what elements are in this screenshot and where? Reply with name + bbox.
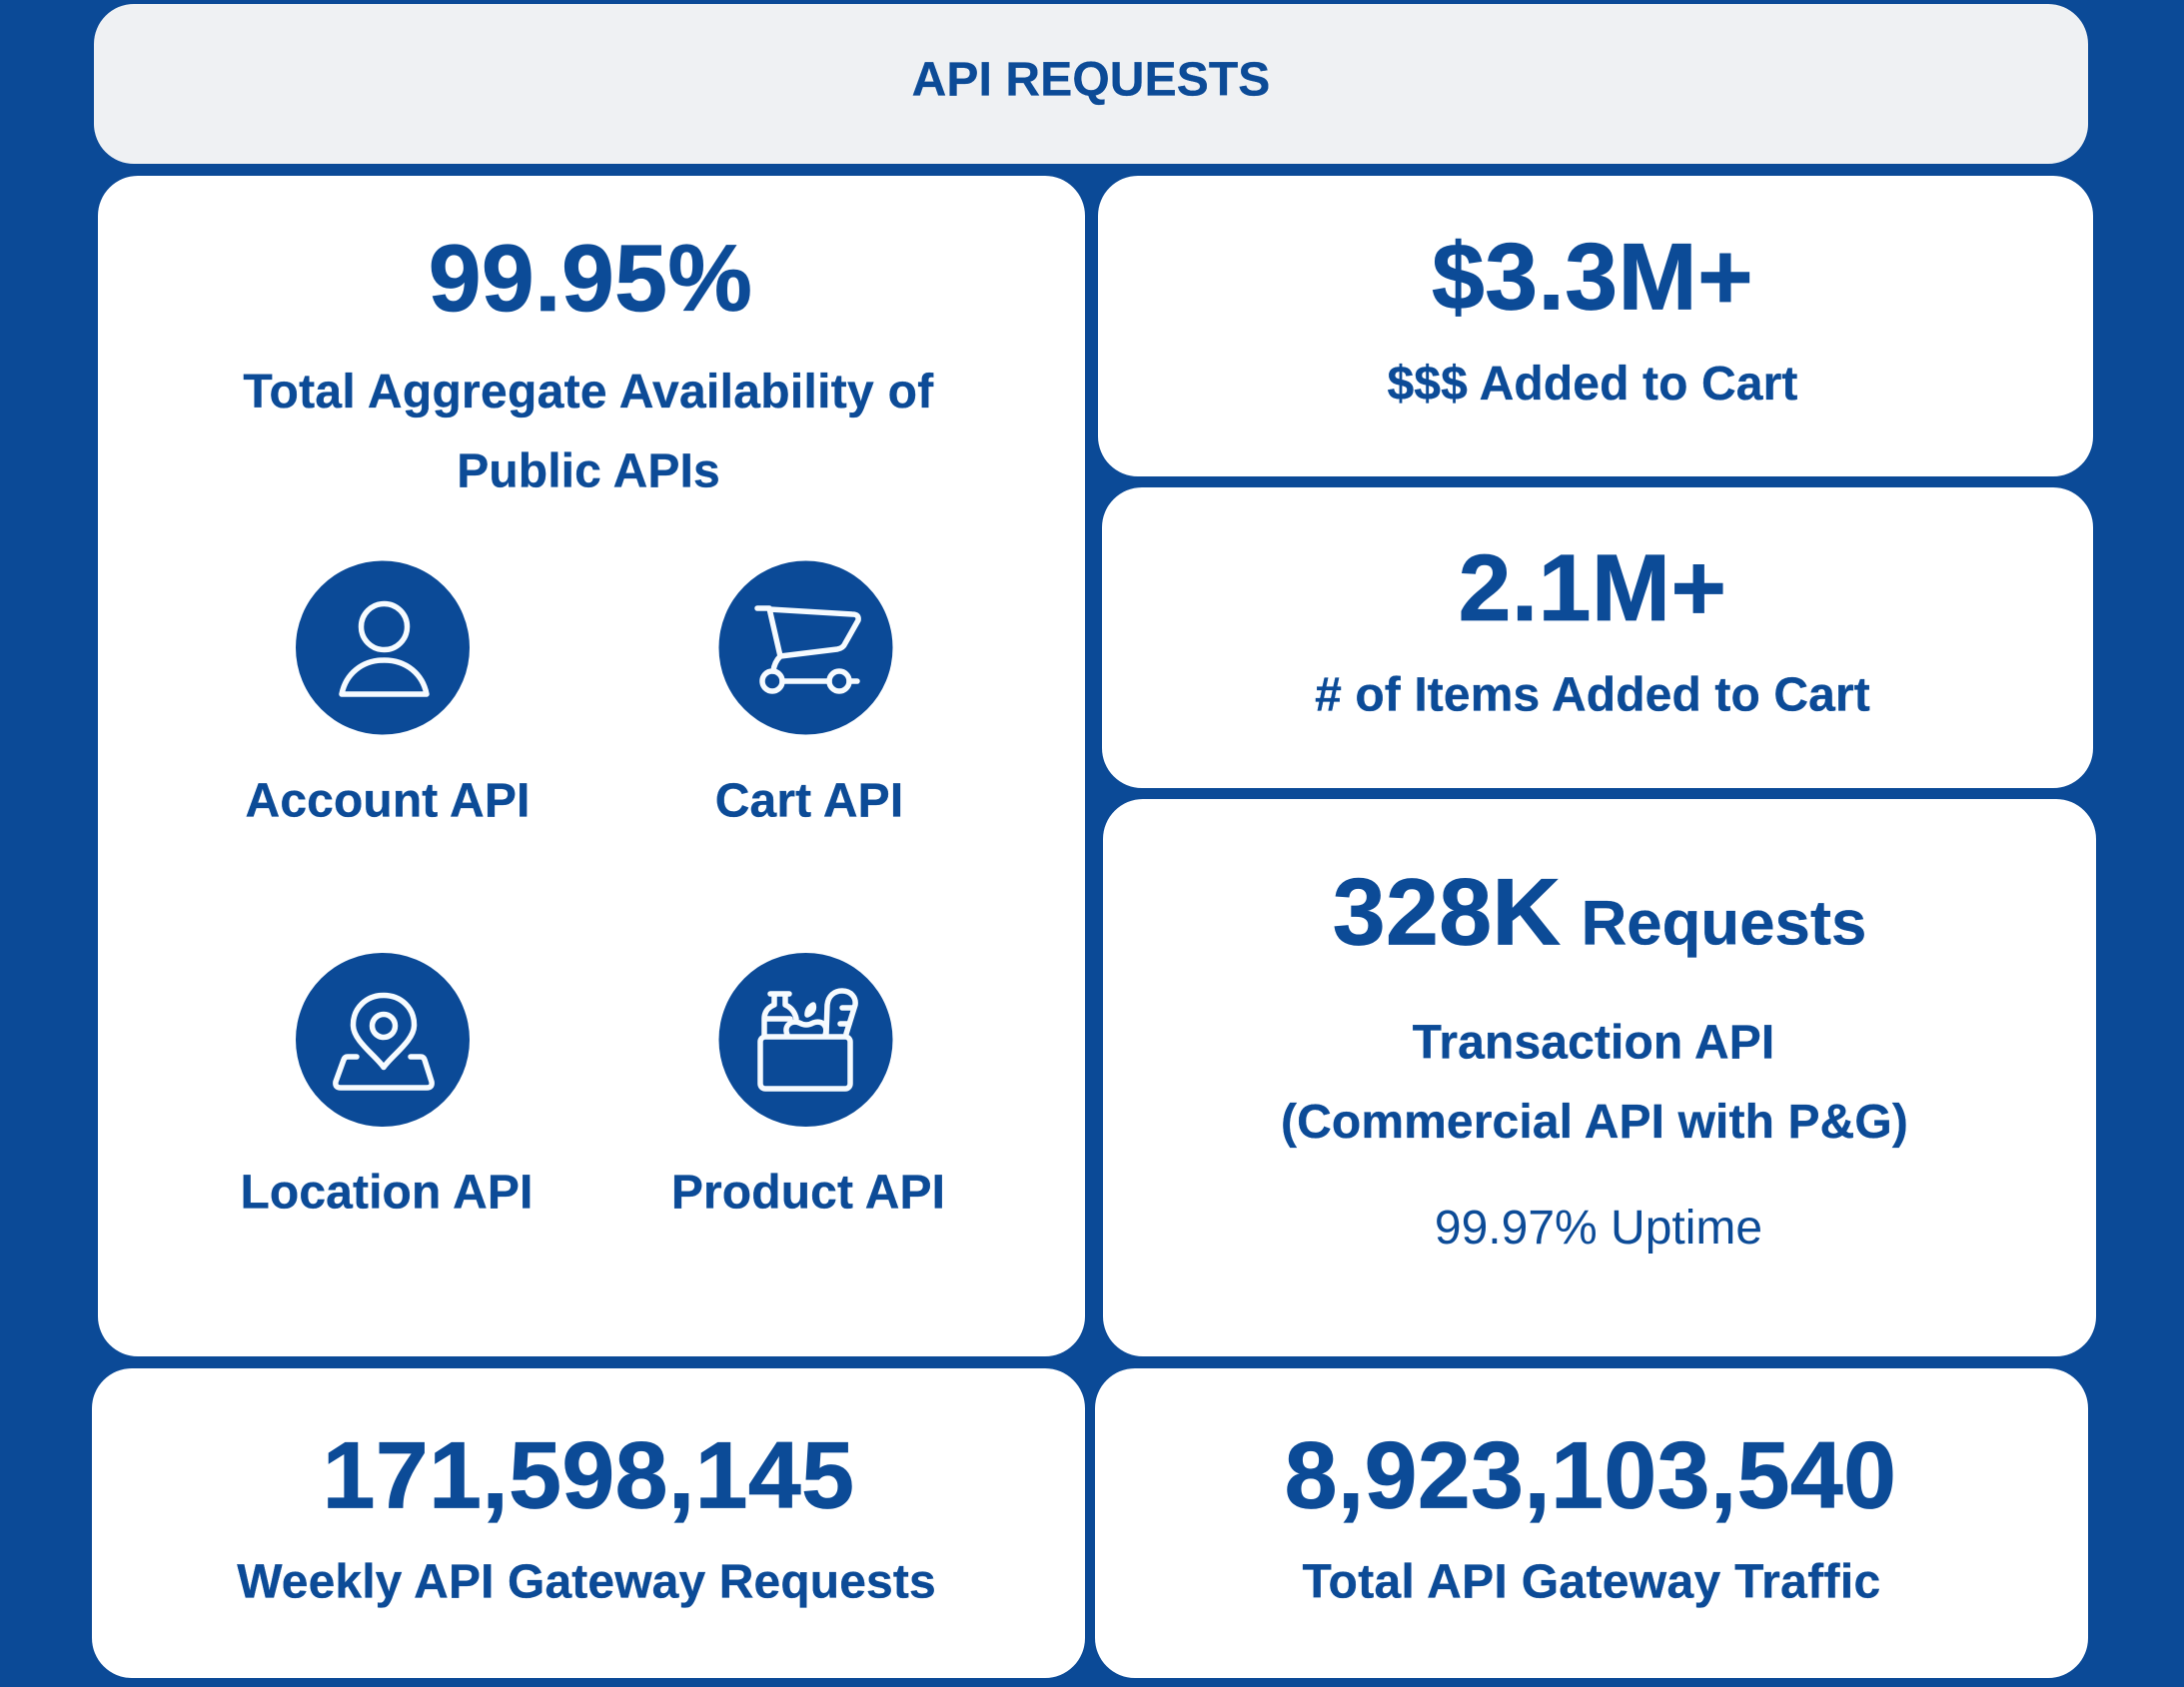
icon: product: [719, 953, 893, 1127]
label: location API: Location API: [240, 1167, 534, 1219]
panel: weekly gateway requests: [92, 1368, 1085, 1678]
icon: account: [296, 561, 470, 735]
stat: dollars: $3.3M+: [1432, 224, 1753, 330]
text: uptime: 99.97% Uptime: [1435, 1202, 1762, 1255]
stat: weekly requests: 171,598,145: [323, 1422, 854, 1528]
text: availability description: Total Aggregate Availability of: [243, 366, 934, 419]
label: product API: Product API: [671, 1167, 945, 1219]
icon: cart: [719, 561, 893, 735]
stat: availability: 99.95%: [429, 226, 752, 332]
stat: items: 2.1M+: [1459, 535, 1726, 641]
title: API REQUESTS: [912, 54, 1270, 106]
text: transaction API description: Transaction API: [1413, 1017, 1774, 1069]
panel: transaction API: [1103, 799, 2096, 1356]
icon: location: [296, 953, 470, 1127]
stat: requests: 328K Requests: [1333, 859, 1866, 965]
text: availability description: [243, 366, 934, 497]
label: account API: Account API: [246, 775, 530, 827]
panel: items added to cart: [1102, 487, 2093, 788]
panel: header: [94, 4, 2088, 164]
stat: total traffic: 8,923,103,540: [1285, 1422, 1896, 1528]
label: cart API: Cart API: [715, 775, 903, 827]
text: transaction API description: [1281, 1017, 1908, 1149]
label: dollars: $$$ Added to Cart: [1387, 358, 1798, 411]
label: items: # of Items Added to Cart: [1315, 669, 1870, 721]
label: weekly requests: Weekly API Gateway Requests: [237, 1556, 936, 1608]
panel: total gateway traffic: [1095, 1368, 2088, 1678]
text: transaction API description: (Commercial API with P&G): [1281, 1096, 1908, 1149]
panel: dollars added to cart: [1098, 176, 2093, 476]
text: availability description: Public APIs: [457, 445, 720, 497]
panel: public API availability: [98, 176, 1085, 1356]
label: total traffic: Total API Gateway Traffic: [1302, 1556, 1881, 1608]
